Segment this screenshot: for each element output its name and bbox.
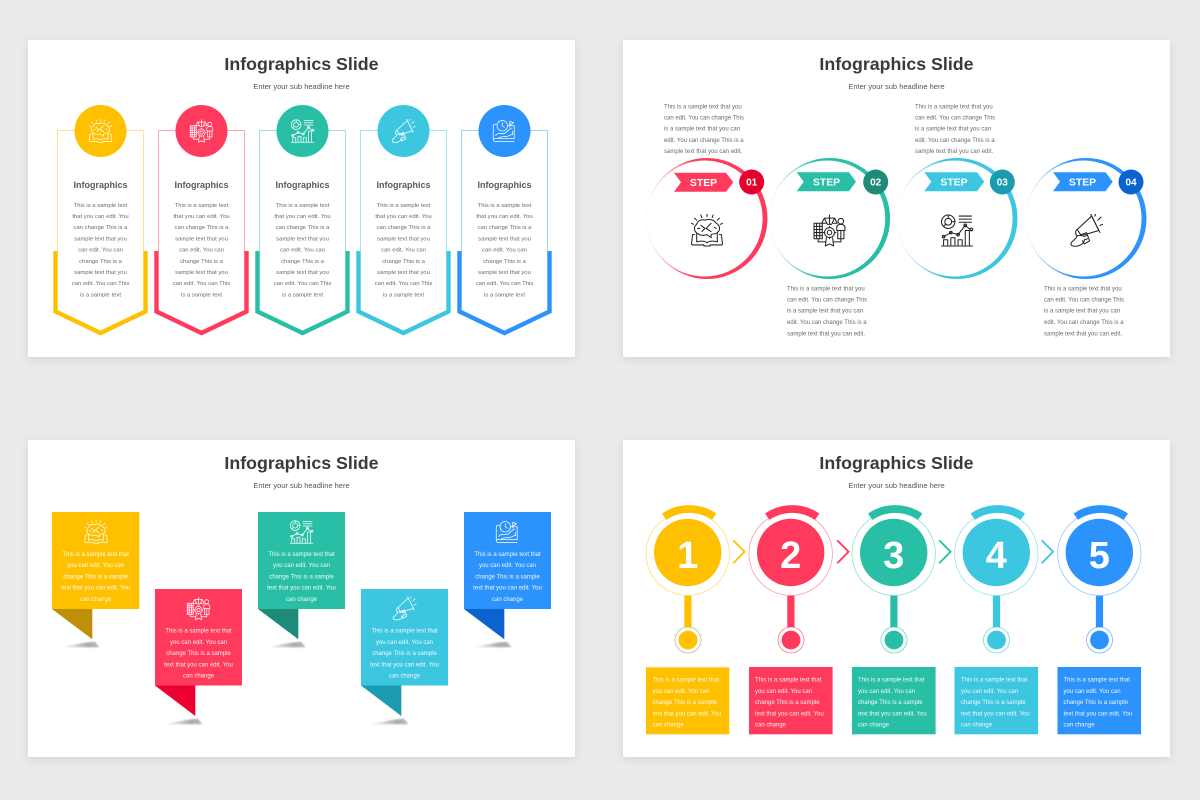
step 5: can change	[1064, 722, 1095, 728]
step 4: can change	[961, 722, 993, 728]
arrow 4	[1042, 540, 1053, 563]
subtitle: Enter your sub headline here	[253, 481, 350, 490]
step 3: can change	[858, 722, 890, 728]
tag 2: change This is a sample	[166, 651, 231, 657]
card 5: This is a sample text	[478, 203, 532, 209]
card 4: This is a sample text	[377, 203, 431, 209]
text block: step 4	[1044, 286, 1124, 337]
card 4: can edit. You can This	[375, 281, 432, 287]
card 1: can edit. You can	[78, 248, 123, 254]
card 3: This is a sample text	[276, 203, 330, 209]
step 3 circle: 03	[997, 178, 1008, 189]
card 1: can change This is a	[74, 225, 128, 231]
tag 2: can change	[183, 674, 215, 680]
text block: step 1: edit. You can change This is a	[664, 138, 744, 144]
card 5: is a sample text	[484, 292, 525, 298]
text block: step 1: can edit. You can change This	[664, 116, 744, 122]
text block: step 3: sample text that you can edit.	[915, 149, 993, 155]
text block: step 4: This is a sample text that you	[1044, 286, 1122, 292]
card 2: that you can edit. You	[173, 214, 230, 220]
subtitle: Enter your sub headline here	[848, 82, 945, 91]
card 2: can edit. You can This	[173, 281, 230, 287]
tag 4: you can edit. You can	[376, 640, 433, 646]
tag 1: can change	[80, 597, 112, 603]
panel: folded tags slide	[28, 440, 575, 757]
text block: step 4: is a sample text that you can	[1044, 309, 1120, 315]
panel: numbered timeline slide	[623, 440, 1170, 757]
tag 1: text that you can edit. You	[61, 586, 130, 592]
step 1	[646, 509, 729, 734]
card 2: is a sample text	[181, 292, 222, 298]
card 1: sample text that you	[74, 270, 127, 276]
card 4: Infographics	[376, 180, 431, 190]
card 3: is a sample text	[282, 292, 323, 298]
tag 4: This is a sample text that	[371, 629, 438, 635]
text block: step 2: edit. You can change This is a	[787, 320, 867, 326]
tag 5: change This is a sample	[475, 574, 540, 580]
step 3 circle	[896, 158, 1018, 279]
arrow 3	[939, 540, 951, 563]
tag 5: you can edit. You can	[479, 563, 536, 569]
card 5: can edit. You can	[482, 248, 527, 254]
subtitle: Enter your sub headline here	[253, 82, 350, 91]
card 1: that you can edit. You	[72, 214, 129, 220]
text block: step 4: sample text that you can edit.	[1044, 331, 1122, 337]
step 2: 2	[780, 535, 801, 577]
step 4: 4	[986, 535, 1007, 577]
step 3	[852, 509, 936, 734]
text block: step 2: can edit. You can change This	[787, 298, 867, 304]
step 4: text that you can edit. You	[961, 711, 1030, 717]
card 3: sample text that you	[276, 270, 329, 276]
tag 4	[361, 589, 448, 724]
step 5: text that you can edit. You	[1064, 711, 1132, 717]
step 3: 3	[883, 535, 904, 577]
card 1: is a sample text	[80, 292, 121, 298]
tag 5: This is a sample text that	[474, 552, 541, 558]
text block: step 1	[664, 104, 744, 155]
card 2: Infographics	[174, 180, 229, 190]
card 2: can change This is a	[175, 225, 229, 231]
text block: step 1: This is a sample text that you	[664, 104, 742, 110]
step 4: you can edit. You can	[961, 689, 1018, 695]
step 1: text that you can edit. You	[652, 711, 721, 717]
step 4: This is a sample text that	[961, 678, 1028, 684]
card 4: is a sample text	[383, 292, 424, 298]
step 5	[1058, 509, 1141, 734]
step 4 circle	[1026, 158, 1146, 279]
step 5: This is a sample text that	[1064, 678, 1130, 684]
card 5	[460, 105, 550, 333]
tag 5	[464, 512, 551, 647]
card 5: can edit. You can This	[476, 281, 533, 287]
step 2: change This is a sample	[755, 700, 820, 706]
step 3: change This is a sample	[858, 700, 923, 706]
step 2 circle	[769, 158, 890, 279]
card 1: Infographics	[73, 180, 128, 190]
card 1: change This is a	[79, 259, 123, 265]
card 5: sample text that you	[478, 236, 531, 242]
step 1: change This is a sample	[652, 700, 718, 706]
panel: header cards slide	[28, 40, 575, 357]
step 2: can change	[755, 722, 787, 728]
card 5: change This is a	[483, 259, 527, 265]
step 1: can change	[652, 722, 684, 728]
tag 1: you can edit. You can	[67, 563, 124, 569]
card 2: sample text that you	[175, 236, 228, 242]
card 3: can edit. You can	[280, 248, 325, 254]
text block: step 2	[787, 286, 867, 337]
card 5: sample text that you	[478, 270, 531, 276]
card 4: that you can edit. You	[375, 214, 432, 220]
tag 3: This is a sample text that	[268, 552, 335, 558]
card 3: Infographics	[275, 180, 330, 190]
arrow 2	[837, 540, 849, 563]
step 2 circle: 02	[870, 178, 882, 189]
text block: step 4: edit. You can change This is a	[1044, 320, 1124, 326]
tag 3: text that you can edit. You	[267, 586, 336, 592]
arrow 1	[733, 540, 745, 563]
step 1: you can edit. You can	[652, 689, 710, 695]
card 1	[56, 105, 146, 333]
card 4: change This is a	[382, 259, 426, 265]
subtitle: Enter your sub headline here	[848, 481, 945, 490]
tag 3	[258, 512, 345, 647]
tag 1: change This is a sample	[63, 574, 129, 580]
card 5: can change This is a	[478, 225, 532, 231]
step 1: This is a sample text that	[652, 678, 719, 684]
card 2: This is a sample text	[175, 203, 229, 209]
text block: step 3: This is a sample text that you	[915, 104, 993, 110]
card 1: sample text that you	[74, 236, 127, 242]
card 1: This is a sample text	[74, 203, 128, 209]
tag 2: This is a sample text that	[165, 629, 232, 635]
card 4: sample text that you	[377, 270, 430, 276]
title: Infographics Slide	[819, 453, 974, 473]
card 2: sample text that you	[175, 270, 228, 276]
tag 5: text that you can edit. You	[473, 586, 542, 592]
card 2: can edit. You can	[179, 248, 224, 254]
step 2: you can edit. You can	[755, 689, 812, 695]
tag 3: change This is a sample	[269, 574, 334, 580]
card 2	[156, 105, 246, 333]
title: Infographics Slide	[819, 54, 974, 74]
tag 2: text that you can edit. You	[164, 662, 233, 668]
card 5: that you can edit. You	[476, 214, 533, 220]
card 1: can edit. You can This	[72, 281, 129, 287]
tag 4: text that you can edit. You	[370, 662, 439, 668]
title: Infographics Slide	[224, 453, 379, 473]
text block: step 3: can edit. You can change This	[915, 116, 995, 122]
card 4: can edit. You can	[381, 248, 426, 254]
card 4: sample text that you	[377, 236, 430, 242]
tag 4: change This is a sample	[372, 651, 437, 657]
tag 3: you can edit. You can	[273, 563, 330, 569]
tag 4: can change	[389, 674, 421, 680]
card 4	[358, 105, 448, 333]
step 1 circle: 01	[746, 178, 758, 189]
card 5: Infographics	[477, 180, 532, 190]
step 2: This is a sample text that	[755, 678, 822, 684]
text block: step 2: sample text that you can edit.	[787, 331, 865, 337]
step 4 circle: 04	[1125, 178, 1137, 189]
step 3: text that you can edit. You	[858, 711, 927, 717]
text block: step 1: is a sample text that you can	[664, 127, 740, 133]
step 3 circle: STEP	[940, 178, 968, 188]
text block: step 2: is a sample text that you can	[787, 309, 863, 315]
card 3: change This is a	[281, 259, 325, 265]
step 3: you can edit. You can	[858, 689, 915, 695]
tag 2: you can edit. You can	[170, 640, 227, 646]
card 3	[258, 105, 348, 333]
text block: step 3: is a sample text that you can	[915, 127, 991, 133]
text block: step 1: sample text that you can edit.	[664, 149, 742, 155]
card 4: can change This is a	[377, 225, 431, 231]
text block: step 4: can edit. You can change This	[1044, 298, 1124, 304]
tag 1	[52, 512, 139, 647]
text block: step 3	[915, 104, 995, 155]
card 3: can change This is a	[276, 225, 330, 231]
step 4: change This is a sample	[961, 700, 1026, 706]
step 1 circle	[646, 158, 768, 279]
step 1: 1	[677, 535, 698, 577]
step 2: text that you can edit. You	[755, 711, 824, 717]
tag 2	[155, 589, 242, 724]
card 3: that you can edit. You	[274, 214, 331, 220]
title: Infographics Slide	[224, 54, 379, 74]
panel: step circles slide	[623, 40, 1170, 357]
step 2	[749, 509, 833, 734]
tag 5: can change	[492, 597, 524, 603]
step 2 circle: STEP	[813, 178, 840, 188]
step 4 circle: STEP	[1069, 178, 1096, 188]
text block: step 2: This is a sample text that you	[787, 286, 865, 292]
card 2: change This is a	[180, 259, 224, 265]
card 3: sample text that you	[276, 236, 329, 242]
step 5: you can edit. You can	[1064, 689, 1121, 695]
step 4	[954, 509, 1038, 734]
tag 3: can change	[286, 597, 318, 603]
tag 1: This is a sample text that	[63, 552, 129, 558]
card 3: can edit. You can This	[274, 281, 331, 287]
step 3: This is a sample text that	[858, 678, 925, 684]
step 5: 5	[1089, 535, 1110, 577]
step 1 circle: STEP	[690, 178, 717, 189]
text block: step 3: edit. You can change This is a	[915, 138, 995, 144]
step 5: change This is a sample	[1064, 700, 1129, 706]
